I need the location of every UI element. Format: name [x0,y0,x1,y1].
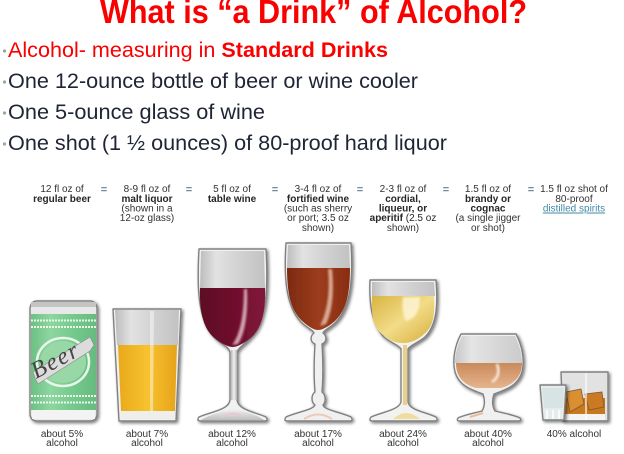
label: distilled spirits: distilled spirits [543,204,605,214]
label: brandy: 1.5 fl oz of [465,184,511,195]
label: brandy: cognac [470,204,506,214]
equals sign: = [528,184,534,196]
label: 7%: alcohol [131,438,163,449]
equals sign: = [101,184,107,196]
label: malt liquor: malt liquor [121,194,173,205]
bullet list [3,39,447,155]
label: 12%: alcohol [216,438,248,449]
label: brandy: brandy or [465,194,511,205]
label: malt liquor: 12-oz glass) [120,213,174,224]
equals sign: = [272,184,278,196]
label: fortified wine: fortified wine [287,194,350,205]
label: distilled spirits: 1.5 fl oz shot of [540,184,608,195]
label: brandy: or shot) [471,223,505,234]
label: fortified wine: 3-4 fl oz of [295,184,342,195]
label: malt liquor: 8-9 fl oz of [124,184,171,195]
label: 24%: about 24% [379,429,427,440]
label: table wine: table wine [208,194,257,205]
alcohol percentage labels row [41,429,601,449]
bullet: standard drinks: Alcohol- measuring in Standard Drinks [8,39,388,62]
label: 5%: alcohol [46,438,78,449]
bullet: liquor: One shot (1 ½ ounces) of 80-proof hard liquor [8,132,447,155]
label: distilled spirits: 80-proof [555,194,593,205]
label: cordial: 2-3 fl oz of [380,184,427,195]
label: cordial: shown) [387,223,419,234]
icon: rocks glass and shot glass [540,372,608,421]
label: cordial: liqueur, or [379,204,427,214]
icon: beer can: Beer [27,338,84,384]
icon: malt liquor glass [113,309,181,421]
icon: cordial glass [370,280,437,421]
rocks glass [561,372,608,421]
label: table wine: 5 fl oz of [213,184,251,195]
label: malt liquor: (shown in a [121,204,173,214]
icon: fortified wine glass [285,243,352,421]
equivalence labels row [33,184,608,234]
label: 17%: about 17% [294,429,342,440]
label: brandy: (a single jigger [455,213,521,224]
equals sign: = [186,184,192,196]
label: fortified wine: (such as sherry [284,204,352,214]
label: fortified wine: or port; 3.5 oz [287,213,349,224]
label: regular beer: 12 fl oz of [40,184,84,195]
label: fortified wine: shown) [302,223,334,234]
label: 24%: alcohol [387,438,419,449]
equals sign: = [357,184,363,196]
label: 7%: about 7% [126,429,168,440]
icon: brandy glass [454,334,523,421]
bullet: wine: One 5-ounce glass of wine [8,101,265,124]
label: 40% spirits: 40% alcohol [547,429,601,440]
label: 17%: alcohol [302,438,334,449]
shot glass [540,385,566,420]
icon: table wine glass [198,249,267,421]
label: cordial: aperitif (2.5 oz [370,213,436,224]
equals sign: = [443,184,449,196]
label: regular beer: regular beer [33,194,91,205]
label: 40%: alcohol [472,438,504,449]
label: 12%: about 12% [208,429,256,440]
icon: beer can [27,301,97,421]
label: cordial: cordial, [385,194,421,205]
label: 40%: about 40% [464,429,512,440]
bullet: beer: One 12-ounce bottle of beer or wine cooler [8,70,418,93]
label: 5%: about 5% [41,429,83,440]
